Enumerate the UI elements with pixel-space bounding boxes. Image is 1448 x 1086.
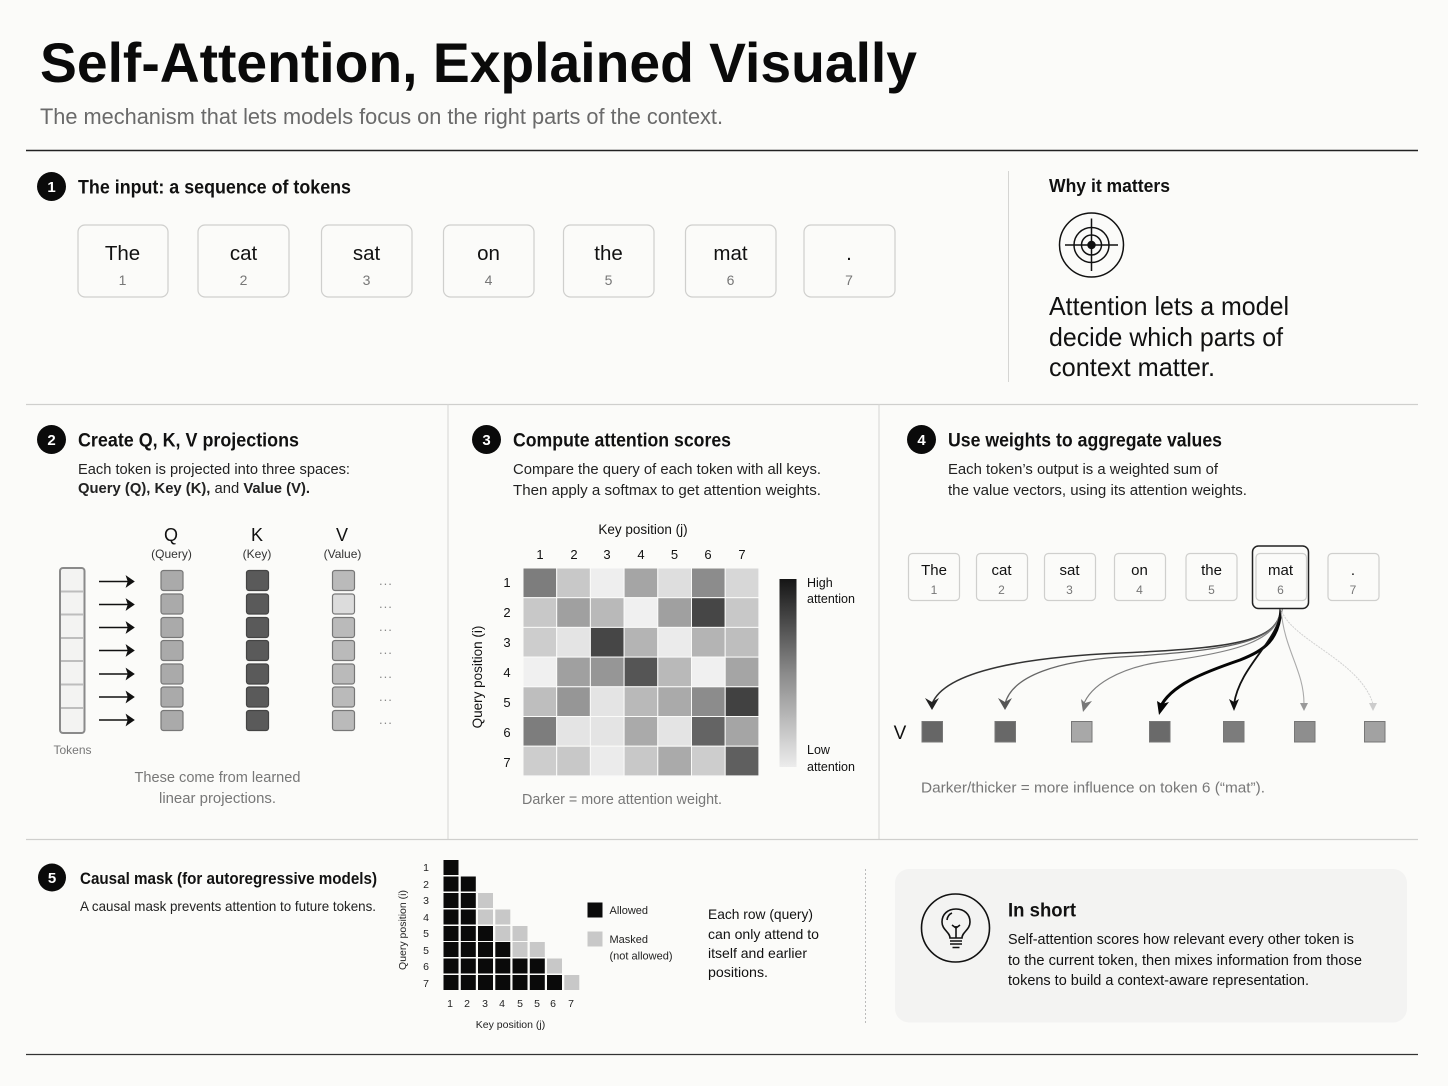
panel: in short [895, 869, 1407, 1022]
mask axis labels: 3 [423, 895, 429, 907]
colour scale legend: High [807, 576, 833, 590]
token row: 6 [1277, 583, 1284, 597]
mask axis labels: 2 [423, 879, 429, 891]
ellipsis column: ... [379, 642, 393, 657]
step 3 description: Compare the query of each token with all keys. [513, 461, 821, 478]
step 4 description [948, 461, 1247, 499]
projections note [134, 769, 300, 807]
heatmap axis labels: Key position (j) [598, 522, 688, 537]
token stack [60, 568, 84, 733]
step 2 description [78, 461, 350, 497]
mask axis labels: 3 [482, 998, 488, 1010]
mask grid [444, 860, 579, 990]
step 1 heading: The input: a sequence of tokens [78, 178, 351, 198]
colour scale legend: attention [807, 592, 855, 606]
step 4 description: Each token’s output is a weighted sum of [948, 461, 1219, 478]
why it matters text: decide which parts of [1049, 322, 1284, 352]
influence note: Darker/thicker = more influence on token 6 (“mat”). [921, 780, 1265, 796]
step 5 heading [38, 864, 377, 892]
token row: the [594, 242, 623, 265]
heatmap axis labels: 5 [671, 547, 678, 562]
token row: 2 [240, 272, 248, 288]
column headers: Q [164, 525, 178, 545]
ellipsis column: ... [379, 573, 393, 588]
mask axis labels: 6 [423, 961, 429, 973]
title: Self-Attention, Explained Visually [40, 31, 917, 94]
why it matters heading: Why it matters [1049, 176, 1170, 196]
mask axis labels: 2 [464, 998, 470, 1010]
heatmap axis labels: 6 [704, 547, 712, 562]
heatmap axis labels: 3 [603, 547, 611, 562]
step 3 heading: Compute attention scores [513, 430, 731, 452]
token row: mat [1268, 562, 1294, 579]
heatmap note: Darker = more attention weight. [522, 792, 722, 808]
step 2 description: Each token is projected into three spaces: [78, 461, 350, 478]
mask axis labels: Key position (j) [476, 1019, 545, 1031]
token row: cat [230, 242, 257, 265]
in short heading: In short [1008, 900, 1077, 922]
icon: target [1060, 213, 1124, 277]
colour scale legend [780, 576, 855, 774]
column headers: (Value) [324, 547, 361, 561]
step 5 description: A causal mask prevents attention to future tokens. [80, 898, 376, 914]
panel: step 5 causal mask [38, 860, 819, 1031]
subtitle: The mechanism that lets models focus on the right parts of the context. [40, 104, 723, 129]
token row: on [477, 242, 500, 265]
mask axis labels: 5 [423, 928, 429, 940]
token row: 2 [998, 583, 1005, 597]
token row: The [105, 242, 140, 265]
column headers: K [251, 525, 263, 545]
projections note: These come from learned [134, 769, 300, 786]
mask axis labels: 5 [423, 945, 429, 957]
heatmap axis labels: 1 [536, 547, 544, 562]
heatmap axis labels: 7 [503, 755, 511, 770]
in short text [1008, 932, 1362, 989]
mask legend: Allowed [610, 905, 648, 917]
token row: 3 [363, 272, 371, 288]
icon: light bulb [922, 894, 990, 962]
mask explanation: can only attend to [708, 926, 819, 942]
heatmap axis labels: 5 [503, 695, 511, 710]
step 4 description: the value vectors, using its attention weights. [948, 482, 1247, 499]
panel: step 2 projections [37, 425, 393, 807]
step 2 heading: Create Q, K, V projections [78, 430, 299, 452]
token row: 5 [605, 272, 613, 288]
heatmap axis labels: 4 [637, 547, 645, 562]
why it matters text: Attention lets a model [1049, 291, 1289, 321]
step 2 heading [37, 425, 299, 454]
step 5 heading: 5 [48, 870, 56, 887]
step 1 heading [37, 172, 351, 201]
heatmap axis labels: 6 [503, 725, 511, 740]
panel: step 1 input tokens [37, 172, 895, 297]
colour scale legend: Low [807, 743, 831, 757]
ellipsis column: ... [379, 712, 393, 727]
panel: step 4 aggregate values [894, 425, 1385, 796]
mask axis labels: 1 [447, 998, 453, 1010]
tokens label: Tokens [53, 743, 92, 757]
column headers [151, 525, 361, 561]
mask axis labels: Query position (i) [397, 890, 409, 970]
token row: 4 [485, 272, 493, 288]
step 4 heading: 4 [917, 432, 926, 449]
in short text: Self-attention scores how relevant every other token is [1008, 932, 1354, 948]
step 3 heading: 3 [482, 432, 491, 449]
ellipsis column: ... [379, 666, 393, 681]
mask axis labels: 4 [499, 998, 505, 1010]
V label: V [894, 723, 907, 744]
token row [908, 546, 1379, 608]
step 2 description: Query (Q), Key (K), and Value (V). [78, 480, 310, 497]
in short text: to the current token, then mixes information from those [1008, 953, 1362, 969]
mask axis labels: 5 [517, 998, 523, 1010]
token row: sat [1059, 562, 1080, 579]
mask explanation: positions. [708, 964, 768, 980]
why it matters text [1049, 291, 1289, 382]
heatmap axis labels: 7 [738, 547, 746, 562]
mask legend [588, 902, 672, 962]
token row: cat [991, 562, 1012, 579]
step 3 description [513, 461, 821, 499]
V column [332, 570, 354, 730]
K column [246, 570, 268, 730]
mask axis labels: 7 [423, 978, 429, 990]
value squares [922, 722, 1385, 742]
heatmap axis labels: 3 [503, 635, 511, 650]
token row: 6 [727, 272, 735, 288]
step 1 heading: 1 [47, 179, 56, 196]
mask explanation: itself and earlier [708, 945, 807, 961]
ellipsis column: ... [379, 596, 393, 611]
step 2 heading: 2 [47, 432, 56, 449]
column headers: (Key) [243, 547, 271, 561]
mask axis labels: 5 [534, 998, 540, 1010]
step 4 heading [907, 425, 1222, 454]
mask explanation: Each row (query) [708, 906, 813, 922]
ellipsis column [379, 573, 393, 727]
influence arrows [925, 609, 1377, 715]
token row: 1 [931, 583, 938, 597]
heatmap axis labels: 1 [503, 575, 511, 590]
heatmap axis labels: 4 [503, 665, 511, 680]
Q column [161, 570, 183, 730]
token row: 3 [1066, 583, 1073, 597]
token row: 7 [845, 272, 853, 288]
ellipsis column: ... [379, 619, 393, 634]
mask legend: (not allowed) [610, 950, 672, 962]
mask axis labels [397, 862, 574, 1031]
token row: on [1131, 562, 1148, 579]
mask legend: Masked [610, 934, 648, 946]
token row: The [921, 562, 947, 579]
ellipsis column: ... [379, 689, 393, 704]
step 4 heading: Use weights to aggregate values [948, 430, 1222, 452]
token row: . [1351, 562, 1355, 579]
heatmap axis labels: 2 [503, 605, 511, 620]
token row: 4 [1136, 583, 1143, 597]
token row: . [846, 242, 852, 265]
projections note: linear projections. [159, 790, 276, 807]
heatmap [523, 568, 759, 776]
token row: 5 [1208, 583, 1215, 597]
panel: step 3 attention scores [470, 425, 855, 808]
token row: sat [353, 242, 380, 265]
column headers: (Query) [151, 547, 192, 561]
heatmap axis labels: Query position (i) [470, 626, 485, 728]
mask axis labels: 1 [423, 862, 429, 874]
step 3 heading [472, 425, 731, 454]
heatmap axis labels [470, 522, 746, 770]
mask axis labels: 7 [568, 998, 574, 1010]
arrows [99, 577, 134, 724]
panel: why it matters [1049, 176, 1289, 382]
heatmap axis labels: 2 [570, 547, 578, 562]
column headers: V [336, 525, 348, 545]
token row: 1 [119, 272, 127, 288]
token row: the [1201, 562, 1222, 579]
colour scale legend: attention [807, 760, 855, 774]
token row [78, 225, 895, 297]
token row: mat [713, 242, 748, 265]
mask axis labels: 4 [423, 912, 429, 924]
why it matters text: context matter. [1049, 352, 1215, 382]
mask explanation [708, 906, 819, 980]
token row: 7 [1350, 583, 1357, 597]
panel background [895, 869, 1407, 1022]
step 3 description: Then apply a softmax to get attention weights. [513, 482, 821, 499]
step 5 heading: Causal mask (for autoregressive models) [80, 869, 377, 888]
mask axis labels: 6 [550, 998, 556, 1010]
in short text: tokens to build a context-aware representation. [1008, 973, 1309, 989]
